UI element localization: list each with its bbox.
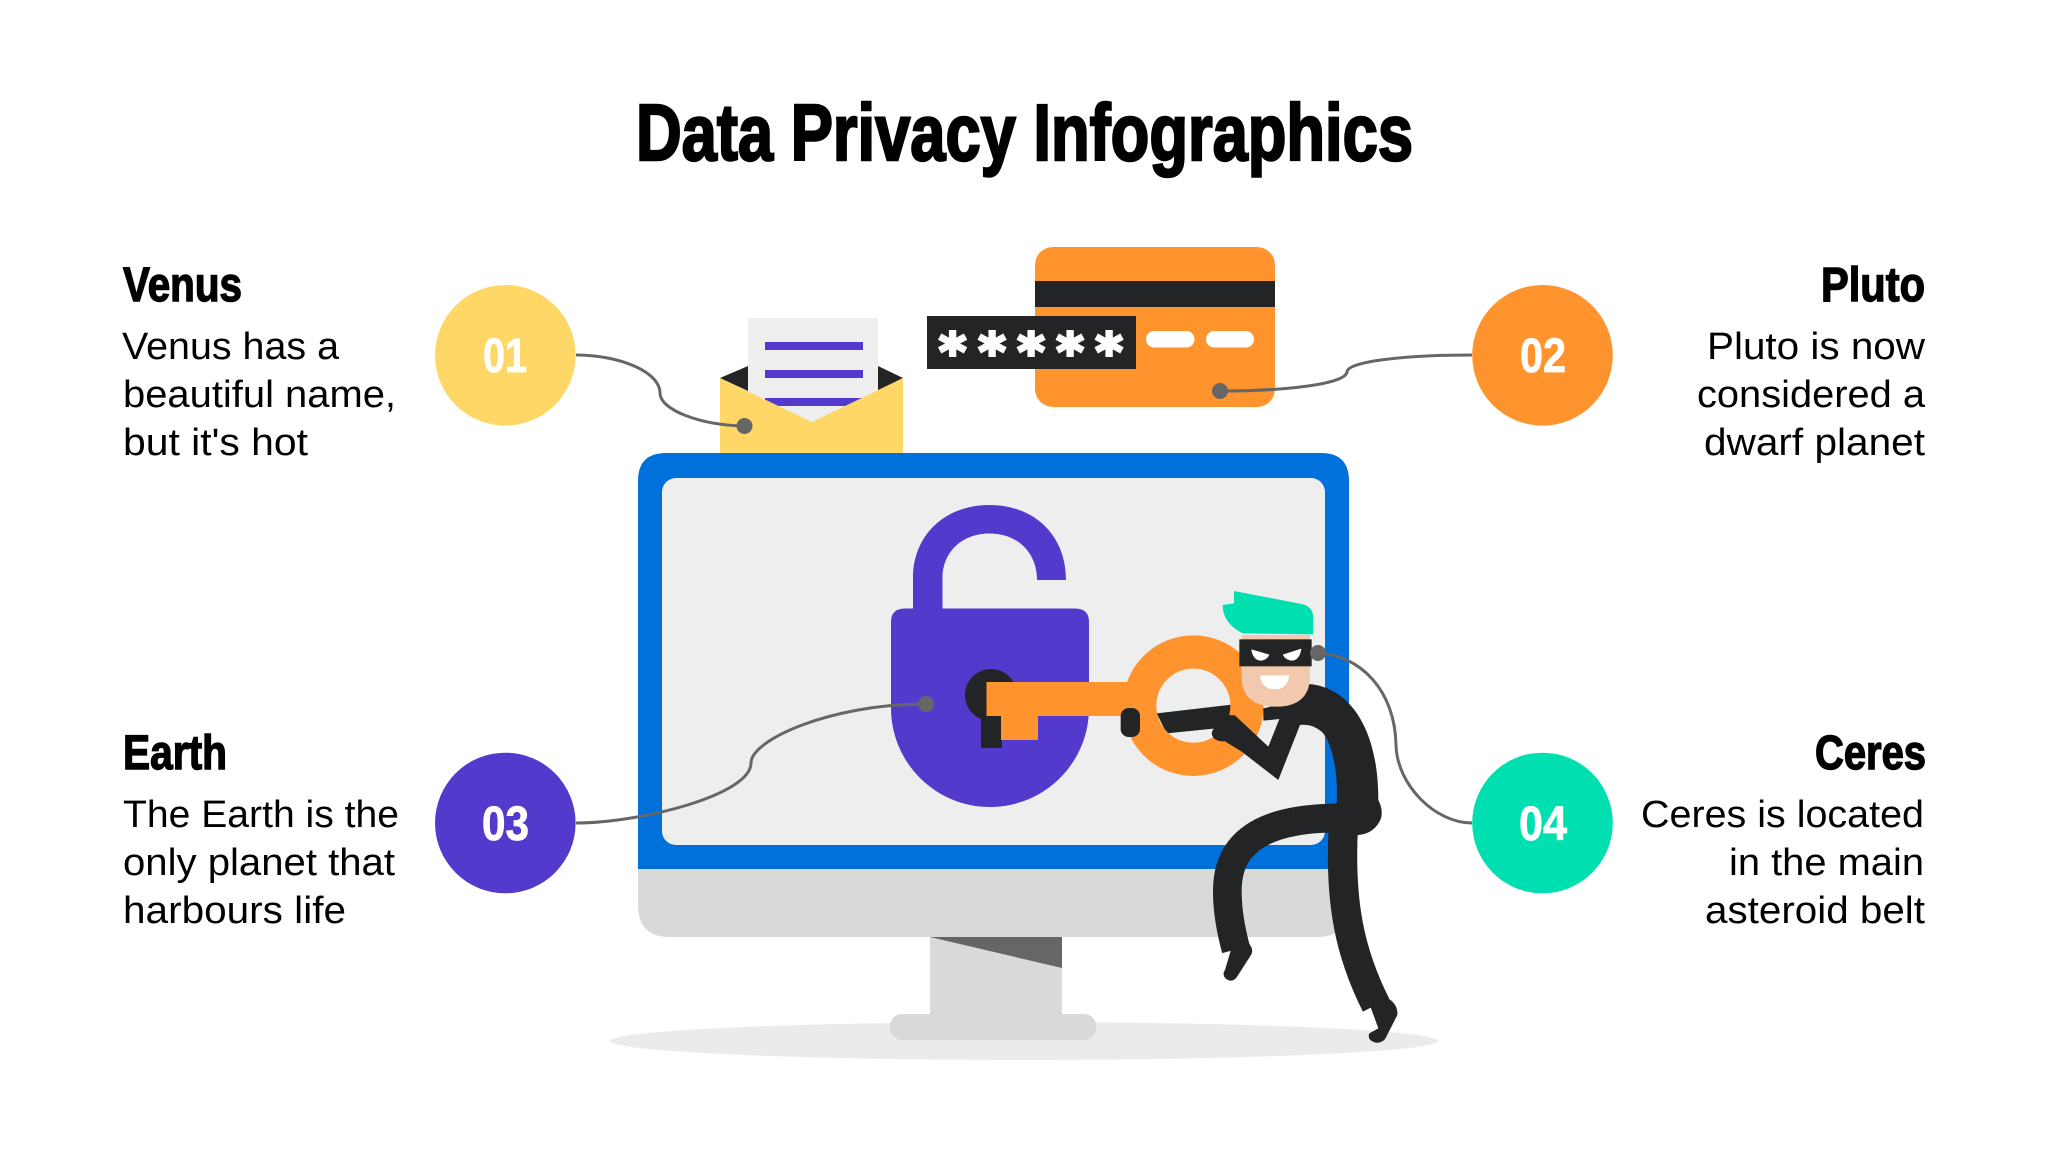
badge 02 — [1472, 285, 1613, 426]
badge 04: 04 — [1519, 798, 1567, 851]
connector: 02 to card — [1212, 355, 1472, 399]
text block: Earth description — [123, 794, 399, 932]
text block: Ceres description — [1641, 794, 1925, 932]
panel: Venus text — [122, 259, 396, 464]
thief hair — [1223, 591, 1313, 634]
thief thumb — [1121, 708, 1140, 737]
badge 01: 01 — [483, 330, 527, 383]
ground shadow — [610, 1022, 1438, 1060]
badge 04 — [1472, 753, 1613, 893]
icon: credit card with password: * — [939, 323, 966, 383]
key ring — [1140, 652, 1247, 759]
panel: Pluto text — [1697, 259, 1926, 464]
icon: credit card with password: * — [1056, 323, 1084, 383]
text block: Pluto description: Pluto is now — [1707, 326, 1926, 368]
text block: Ceres description: asteroid belt — [1705, 890, 1925, 932]
heading: Venus: Venus — [123, 259, 242, 312]
icon: key — [986, 682, 1136, 740]
text block: Ceres description: in the main — [1729, 842, 1924, 884]
badge 03: 03 — [482, 798, 529, 851]
thief mask — [1239, 639, 1312, 666]
text block: Pluto description — [1697, 326, 1926, 464]
heading: Ceres: Ceres — [1815, 727, 1926, 780]
panel: Ceres text — [1641, 727, 1926, 932]
text block: Pluto description: considered a — [1697, 374, 1926, 416]
text block: Venus description: beautiful name, — [123, 374, 396, 416]
text block: Venus description: Venus has a — [122, 326, 340, 368]
monitor — [638, 453, 1349, 1040]
heading: Earth: Earth — [123, 727, 227, 780]
connector: 04 to thief — [1310, 645, 1472, 823]
thief figure — [1121, 591, 1397, 1043]
thief eyes — [1251, 649, 1301, 661]
text block: Venus description — [122, 326, 396, 464]
panel: Earth text — [123, 727, 399, 932]
text block: Pluto description: dwarf planet — [1704, 422, 1925, 464]
text block: Earth description: only planet that — [123, 842, 395, 884]
heading: Pluto: Pluto — [1821, 259, 1925, 312]
icon: credit card with password: * — [1096, 323, 1123, 383]
thief mouth — [1260, 675, 1289, 689]
text block: Earth description: harbours life — [123, 890, 346, 932]
thief face — [1242, 635, 1310, 707]
thief torso and arm — [1212, 684, 1382, 835]
icon: envelope with letter — [720, 318, 903, 456]
text block: Earth description: The Earth is the — [123, 794, 399, 836]
title: Data Privacy Infographics — [636, 88, 1413, 177]
badge 01 — [435, 285, 576, 426]
thief front leg — [1223, 818, 1367, 981]
badge 02: 02 — [1520, 330, 1566, 383]
thief back leg — [1343, 827, 1397, 1043]
icon: open padlock — [891, 505, 1089, 807]
icon: credit card with password: * — [1018, 323, 1045, 383]
connector: 01 to envelope — [576, 355, 752, 434]
icon: credit card with password: * — [978, 323, 1006, 383]
thief forearm behind ring — [1157, 705, 1233, 733]
icon: credit card with password — [927, 247, 1275, 407]
badge 03 — [435, 753, 576, 893]
text block: Ceres description: Ceres is located — [1641, 794, 1924, 836]
connector: 03 to lock — [576, 696, 934, 823]
text block: Venus description: but it's hot — [123, 422, 308, 464]
